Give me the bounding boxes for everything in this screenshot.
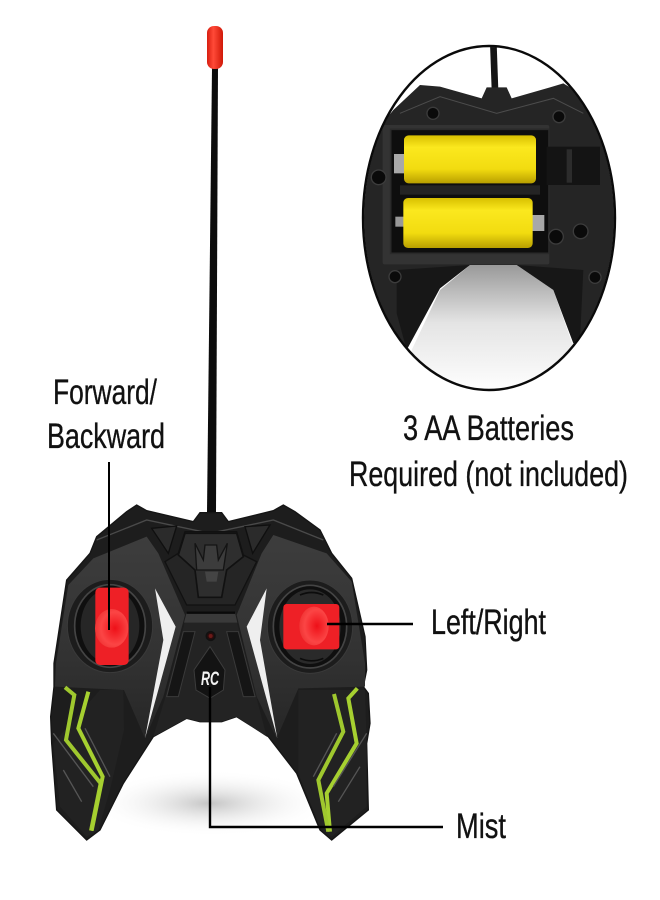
label: mist: Mist	[456, 807, 506, 846]
screws	[371, 107, 601, 283]
RC badge: RC	[201, 669, 220, 690]
leader line: left/right	[327, 623, 413, 625]
white accent right	[247, 588, 277, 738]
label: forward/backward	[47, 373, 165, 456]
RC badge	[194, 647, 225, 698]
inset cable	[490, 47, 498, 88]
indicator light	[206, 632, 215, 640]
lower center panel	[153, 615, 267, 737]
leader line: forward/backward	[108, 462, 110, 630]
antenna	[207, 26, 223, 512]
side wing pieces	[152, 526, 177, 553]
inset remote back	[364, 83, 614, 346]
label: left/right: Left/Right	[431, 603, 546, 642]
battery 1	[404, 135, 536, 183]
left grip	[53, 687, 124, 837]
left shoulder panel	[55, 537, 185, 738]
white accent left	[145, 588, 176, 738]
label: batteries	[349, 409, 628, 494]
leader line: mist	[210, 687, 443, 827]
right stick	[267, 580, 353, 673]
center top panel	[165, 532, 257, 605]
battery bay	[383, 125, 549, 264]
label: forward/backward: Forward/	[53, 373, 157, 412]
top ridge	[97, 520, 323, 540]
battery 2	[403, 198, 533, 248]
right shoulder panel	[237, 535, 365, 738]
battery inset oval	[357, 43, 620, 393]
label: batteries: 3 AA Batteries	[403, 409, 574, 448]
inset leg shading	[397, 265, 583, 350]
label: forward/backward: Backward	[47, 417, 165, 456]
remote controller	[51, 505, 370, 840]
battery springs	[394, 154, 405, 173]
left stick	[67, 579, 153, 673]
right grip	[298, 688, 367, 837]
inset shadow gap	[412, 265, 572, 372]
controller body	[51, 505, 370, 840]
inset ridge	[400, 97, 583, 113]
infographic canvas	[49, 26, 626, 841]
